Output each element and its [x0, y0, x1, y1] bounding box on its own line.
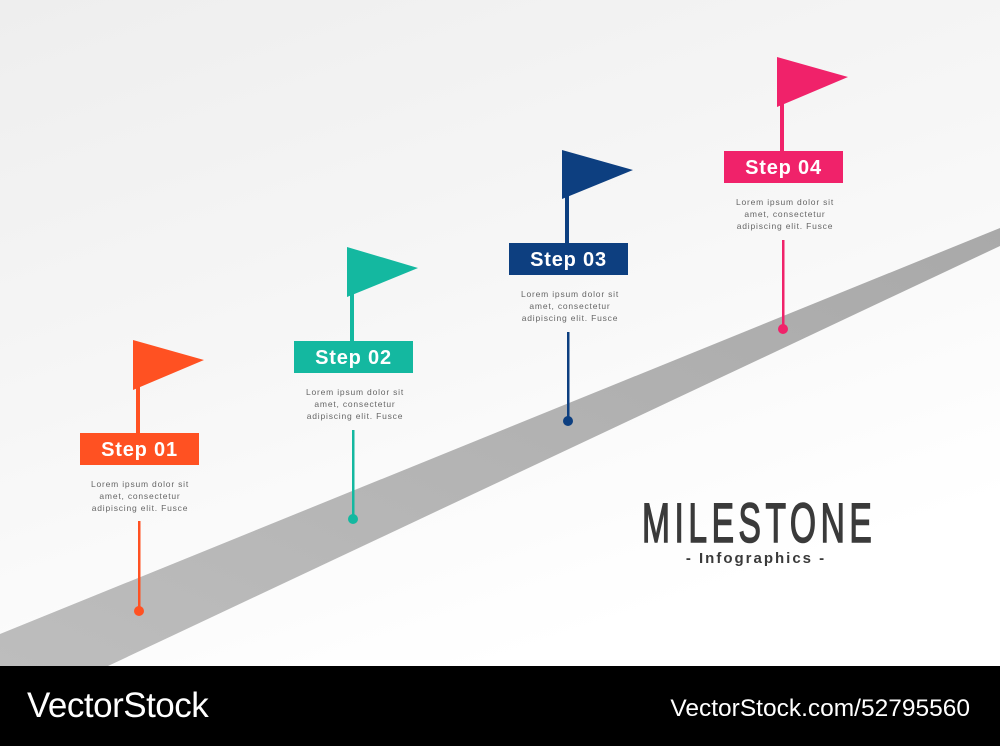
text 02: adipiscing elit. Fusce	[307, 411, 403, 421]
text 01: Lorem ipsum dolor sit	[91, 479, 189, 489]
pin 02	[348, 430, 358, 524]
label: Step 01: Step 01	[101, 439, 178, 461]
text 04	[736, 197, 834, 231]
text 04: Lorem ipsum dolor sit	[736, 197, 834, 207]
label: Step 04	[724, 151, 843, 183]
text 01	[91, 479, 189, 513]
label: Step 03	[509, 243, 628, 275]
text 04: amet, consectetur	[744, 209, 826, 219]
text 02	[306, 387, 404, 421]
pin 04	[778, 240, 788, 334]
text 01: amet, consectetur	[99, 491, 181, 501]
label: Step 04: Step 04	[745, 157, 822, 179]
step 03	[509, 150, 633, 426]
text 03: amet, consectetur	[529, 301, 611, 311]
text 03: Lorem ipsum dolor sit	[521, 289, 619, 299]
text 02: amet, consectetur	[314, 399, 396, 409]
text 01: adipiscing elit. Fusce	[92, 503, 188, 513]
flag 02	[347, 247, 418, 341]
flag 04	[777, 57, 848, 151]
flag 01	[133, 340, 204, 433]
flag 03	[562, 150, 633, 243]
subtitle: - Infographics -	[686, 550, 826, 567]
pin 03	[563, 332, 573, 426]
text 04: adipiscing elit. Fusce	[737, 221, 833, 231]
step 01	[80, 340, 204, 616]
step 04	[724, 57, 848, 334]
label: Step 02	[294, 341, 413, 373]
text 02: Lorem ipsum dolor sit	[306, 387, 404, 397]
footer bar	[0, 666, 1000, 746]
text 03	[521, 289, 619, 323]
title: MILESTONE	[642, 491, 872, 554]
text 03: adipiscing elit. Fusce	[522, 313, 618, 323]
label: Step 03: Step 03	[530, 249, 607, 271]
label: Step 01	[80, 433, 199, 465]
footer bar: VectorStock.com/52795560	[670, 695, 970, 722]
footer bar: VectorStock	[27, 686, 209, 725]
step 02	[294, 247, 418, 524]
label: Step 02: Step 02	[315, 347, 392, 369]
road	[0, 228, 1000, 666]
pin 01	[134, 521, 144, 616]
